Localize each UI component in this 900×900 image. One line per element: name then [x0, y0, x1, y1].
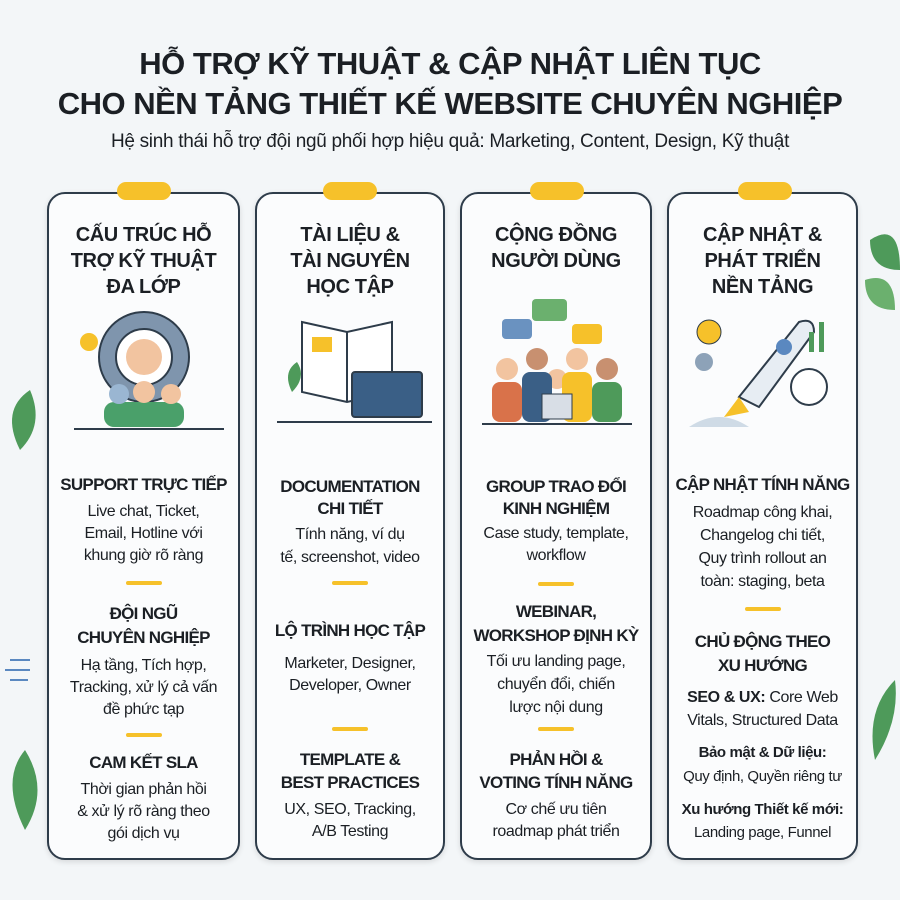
panel: community: VOTING TÍNH NĂNG: [479, 773, 633, 792]
panel: documentation: DOCUMENTATION: [280, 477, 420, 496]
panel: updates: Xu hướng Thiết kế mới:: [682, 801, 843, 818]
panel: community: Tối ưu landing page,: [487, 653, 625, 670]
panel: documentation: UX, SEO, Tracking,: [284, 801, 416, 818]
panel: updates: NỀN TẢNG: [712, 276, 813, 298]
panel: documentation: Developer, Owner: [289, 677, 411, 694]
panel: community: CỘNG ĐỒNG: [495, 224, 617, 246]
section: SLA: CAM KẾT SLA: [89, 753, 198, 772]
panel: support structure: Thời gian phản hồi: [80, 781, 207, 798]
panel: support structure: [47, 192, 240, 860]
panel: updates: CHỦ ĐỘNG THEO: [695, 632, 830, 651]
panel: community: workflow: [526, 547, 586, 564]
panel: documentation: Marketer, Designer,: [284, 655, 416, 672]
panel: documentation: [255, 192, 445, 860]
panel: updates: CẬP NHẬT TÍNH NĂNG: [675, 475, 850, 494]
panel: support structure: Tracking, xử lý cả vấn: [70, 679, 217, 696]
panel: support structure: & xử lý rõ ràng theo: [77, 803, 210, 820]
panel: updates: Quy trình rollout an: [698, 550, 827, 567]
panel: updates: Landing page, Funnel: [694, 824, 831, 841]
illustration: rocket: [689, 320, 828, 427]
panel 1 tab: [117, 182, 171, 200]
panel: community: Cơ chế ưu tiên: [506, 801, 606, 818]
subtitle: Hệ sinh thái hỗ trợ đội ngũ phối hợp hiệu quả: Marketing, Content, Design, Kỹ thuật: [111, 131, 789, 152]
panel: updates: PHÁT TRIỂN: [704, 250, 820, 272]
panel 3 tab: [530, 182, 584, 200]
title: [58, 46, 842, 121]
panel: updates: toàn: staging, beta: [700, 573, 825, 590]
panel: updates: Changelog chi tiết,: [700, 527, 825, 544]
panel: updates: CẬP NHẬT &: [703, 224, 822, 246]
heading: TRỢ KỸ THUẬT: [71, 250, 216, 272]
panel: updates: [667, 192, 858, 860]
panel: documentation: TÀI NGUYÊN: [290, 250, 410, 272]
panel: documentation: BEST PRACTICES: [281, 773, 419, 792]
decoration: right leaves: [865, 234, 900, 760]
panel: documentation: A/B Testing: [312, 823, 388, 840]
panel: updates: SEO & UX: Core Web: [687, 689, 838, 706]
panel: community: chuyển đổi, chiến: [497, 676, 615, 693]
panel: community: WORKSHOP ĐỊNH KỲ: [473, 626, 639, 645]
panel: documentation: TÀI LIỆU &: [300, 224, 400, 246]
panel: documentation: HỌC TẬP: [306, 276, 394, 298]
panel: community: NGƯỜI DÙNG: [491, 250, 621, 272]
panel: support structure: Hạ tầng, Tích hợp,: [81, 657, 206, 674]
illustration: support gear: [74, 311, 224, 430]
panel: community: PHẢN HỒI &: [509, 750, 603, 769]
section: team: CHUYÊN NGHIỆP: [77, 628, 210, 647]
decoration: left leaves: [5, 390, 38, 830]
panel: documentation: tế, screenshot, video: [280, 549, 420, 566]
panel 2 tab: [323, 182, 377, 200]
panel: support structure: khung giờ rõ ràng: [84, 547, 203, 564]
title: CHO NỀN TẢNG THIẾT KẾ WEBSITE CHUYÊN NGHIỆP: [58, 86, 842, 121]
title: HỖ TRỢ KỸ THUẬT & CẬP NHẬT LIÊN TỤC: [139, 46, 761, 81]
panel: community: roadmap phát triển: [492, 823, 620, 840]
panel: support structure: đề phức tạp: [103, 701, 184, 718]
panel: updates: XU HƯỚNG: [718, 656, 807, 675]
section: support: SUPPORT TRỰC TIẾP: [60, 475, 227, 494]
heading: ĐA LỚP: [107, 276, 180, 298]
illustration: people group: [482, 299, 632, 425]
panel: community: lược nội dung: [509, 699, 603, 716]
panel: support structure: Email, Hotline với: [84, 525, 202, 542]
panel: documentation: Tính năng, ví dụ: [295, 526, 405, 543]
panel: support structure: Live chat, Ticket,: [88, 503, 199, 520]
panel: support structure: gói dịch vụ: [107, 825, 180, 842]
panel: updates: Roadmap công khai,: [693, 504, 832, 521]
panel: updates: Vitals, Structured Data: [687, 712, 838, 729]
section: team: [77, 604, 210, 647]
heading: [70, 222, 216, 298]
panel 4 tab: [738, 182, 792, 200]
panel: documentation: CHI TIẾT: [317, 499, 383, 518]
panel: updates: Bảo mật & Dữ liệu:: [699, 744, 826, 761]
panel: documentation: TEMPLATE &: [300, 750, 400, 769]
heading: CẤU TRÚC HỖ: [76, 224, 211, 246]
panel: updates: Quy định, Quyền riêng tư: [683, 768, 842, 785]
panel: documentation: LỘ TRÌNH HỌC TẬP: [275, 621, 425, 640]
panel: community: GROUP TRAO ĐỔI: [486, 477, 626, 496]
section: team: ĐỘI NGŨ: [110, 604, 177, 623]
panel: community: [460, 192, 652, 860]
panel: community: WEBINAR,: [516, 602, 596, 621]
illustration: book and laptop: [277, 320, 432, 423]
panel: community: Case study, template,: [483, 525, 629, 542]
panel: community: KINH NGHIỆM: [503, 499, 609, 518]
